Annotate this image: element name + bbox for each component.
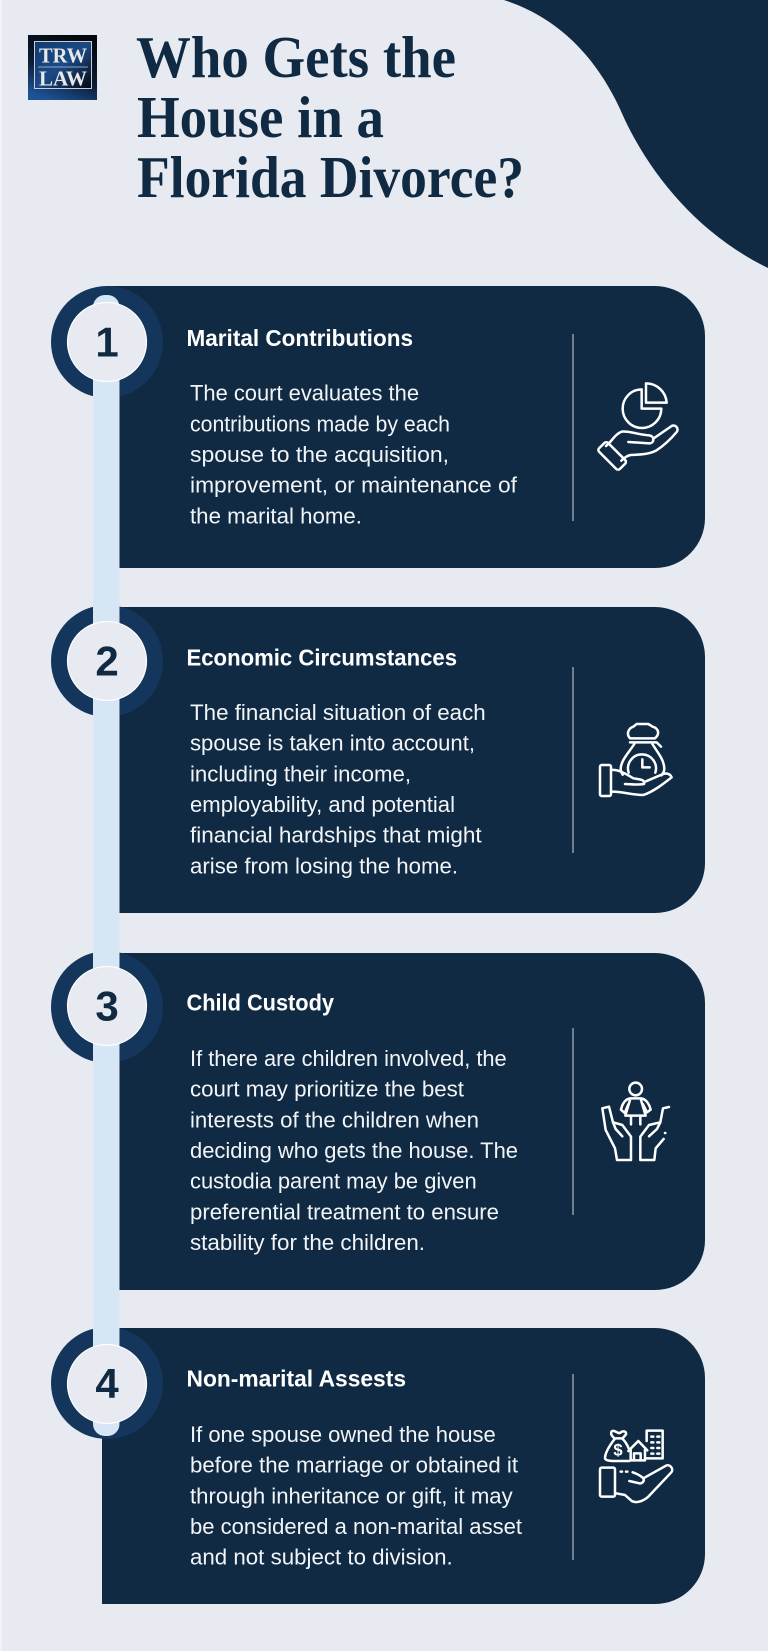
badge ring 3 xyxy=(51,951,163,1063)
text: child custody: If there are children involved, the xyxy=(190,1046,507,1071)
text: economic circumstances: arise from losing the home. xyxy=(190,853,458,878)
decorative corner blob xyxy=(504,0,768,268)
text: economic circumstances: spouse is taken into account, xyxy=(190,731,475,756)
text: non-marital assets: If one spouse owned the house xyxy=(190,1422,496,1447)
text: child custody: stability for the children. xyxy=(190,1230,425,1255)
heading: non-marital assets: Non-marital Assests xyxy=(186,1366,406,1392)
text: non-marital assets: through inheritance or gift, it may xyxy=(190,1483,513,1508)
text: child custody: preferential treatment to ensure xyxy=(190,1199,499,1224)
badge 3: 3 xyxy=(95,982,119,1030)
text: child custody: custodia parent may be given xyxy=(190,1169,477,1194)
text: non-marital assets xyxy=(190,1422,523,1570)
text: non-marital assets: be considered a non-marital asset xyxy=(190,1514,523,1539)
logo: TRW Law: TRW xyxy=(39,44,87,68)
text: economic circumstances: employability, and potential xyxy=(190,792,455,817)
badge 1: 1 xyxy=(95,318,119,366)
panel: non-marital assets xyxy=(102,1328,705,1604)
text: marital contributions: the marital home. xyxy=(190,503,362,528)
heading: marital contributions: Marital Contributions xyxy=(186,325,413,351)
text: child custody: interests of the children when xyxy=(190,1107,479,1132)
icon: hand holding money, house and building: $ xyxy=(613,1441,623,1460)
text: non-marital assets: before the marriage or obtained it xyxy=(190,1453,519,1478)
badge 1 xyxy=(68,302,146,382)
text: marital contributions xyxy=(190,381,518,528)
title: Florida Divorce? xyxy=(137,144,524,210)
text: non-marital assets: and not subject to division. xyxy=(190,1545,453,1570)
text: marital contributions: contributions made by each xyxy=(190,411,450,436)
logo: TRW Law: LAW xyxy=(39,66,87,90)
panel: child custody xyxy=(107,953,705,1290)
badge ring 4 xyxy=(51,1327,163,1439)
badge 2: 2 xyxy=(95,638,119,684)
text: economic circumstances: The financial situation of each xyxy=(190,700,486,725)
heading: economic circumstances: Economic Circumstances xyxy=(186,645,457,671)
text: marital contributions: The court evaluates the xyxy=(190,381,419,406)
text: economic circumstances: financial hardships that might xyxy=(190,823,482,848)
badge ring 2 xyxy=(51,605,163,717)
title: Who Gets the xyxy=(136,24,456,90)
text: economic circumstances xyxy=(190,700,486,878)
badge 4 xyxy=(68,1344,146,1424)
icon: hand holding money, house and building xyxy=(600,1431,672,1502)
badge ring 1 xyxy=(51,286,163,398)
heading: child custody: Child Custody xyxy=(186,990,334,1016)
timeline bar xyxy=(93,295,120,1436)
icon: hands protecting child xyxy=(602,1083,669,1160)
icon: hand holding money bag with clock xyxy=(600,724,672,796)
text: child custody: deciding who gets the house. The xyxy=(190,1138,518,1163)
badge 2 xyxy=(68,622,146,700)
text: child custody xyxy=(190,1046,518,1255)
logo: TRW Law xyxy=(28,35,97,100)
icon: hand holding pie chart xyxy=(597,383,678,471)
badge 3 xyxy=(68,966,146,1046)
title: House in a xyxy=(137,84,384,150)
text: child custody: court may prioritize the best xyxy=(190,1077,465,1102)
panel: marital contributions xyxy=(107,286,705,568)
text: marital contributions: spouse to the acquisition, xyxy=(190,442,449,467)
text: economic circumstances: including their income, xyxy=(190,761,411,786)
title xyxy=(136,24,524,210)
panel: economic circumstances xyxy=(107,607,705,913)
text: marital contributions: improvement, or maintenance of xyxy=(190,473,518,498)
badge 4: 4 xyxy=(95,1360,119,1407)
